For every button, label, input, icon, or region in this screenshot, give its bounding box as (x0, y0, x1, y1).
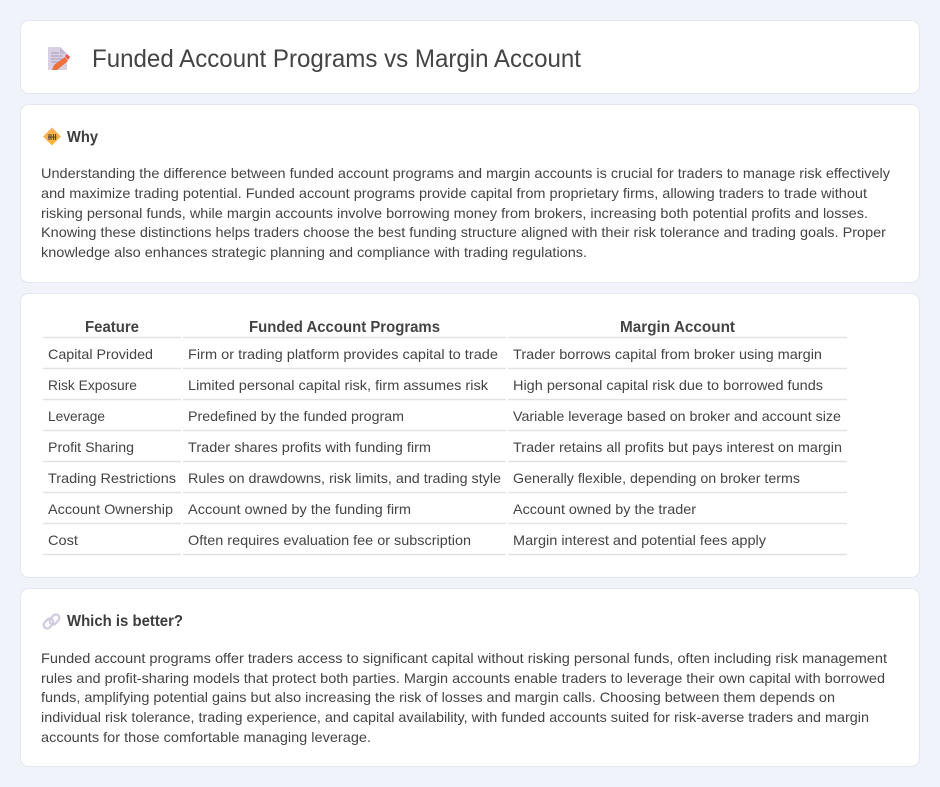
icon: document with pencil (48, 47, 70, 70)
row: profit sharing: Profit Sharing (48, 439, 134, 455)
row: risk exposure: Risk Exposure (48, 377, 137, 393)
row: risk exposure (43, 377, 847, 400)
which is better paragraph: rules and profit-sharing models that protect both parties. Margin accounts enable traders to leverage their own capital with borrowed (41, 670, 885, 686)
row: profit sharing: Trader shares profits with funding firm (188, 439, 431, 455)
title text: Funded Account Programs vs Margin Account (92, 45, 581, 73)
which is better paragraph: accounts for those comfortable managing leverage. (41, 729, 371, 745)
icon: warning diamond (43, 128, 61, 146)
panel: why (20, 104, 920, 282)
row: cost: Margin interest and potential fees apply (513, 532, 766, 548)
row: risk exposure: High personal capital risk due to borrowed funds (513, 377, 823, 393)
panel: which is better (20, 588, 920, 766)
table header: Feature (85, 319, 139, 336)
which is better paragraph: individual risk tolerance, trading experience, and capital availability, with funded accounts suited for risk-averse traders and margin (41, 709, 869, 725)
row: trading restrictions: Generally flexible, depending on broker terms (513, 470, 800, 486)
row: capital provided: Firm or trading platform provides capital to trade (188, 346, 498, 362)
row: cost (43, 532, 847, 554)
row: capital provided (43, 346, 847, 368)
row: capital provided: Trader borrows capital from broker using margin (513, 346, 822, 362)
table header (43, 319, 847, 338)
which is better paragraph: funds, amplifying potential gains but also increasing the risk of losses and margin calls. Choosing between them depends on (41, 689, 835, 705)
row: account ownership (43, 501, 847, 524)
why paragraph: Understanding the difference between funded account programs and margin accounts is crucial for traders to manage risk effectively (41, 165, 890, 181)
why paragraph (41, 165, 890, 260)
row: account ownership: Account Ownership (48, 501, 173, 517)
row: cost: Cost (48, 532, 78, 548)
heading: why: Why (67, 129, 98, 146)
panel: comparison table (20, 294, 920, 578)
row: cost: Often requires evaluation fee or subscription (188, 532, 471, 548)
row: risk exposure: Limited personal capital risk, firm assumes risk (188, 377, 489, 393)
row: account ownership: Account owned by the trader (513, 501, 696, 517)
why paragraph: risking personal funds, while margin accounts involve borrowing money from brokers, increasing both potential profits and losses. (41, 205, 868, 221)
row: trading restrictions: Rules on drawdowns, risk limits, and trading style (188, 470, 501, 486)
icon: chain link (42, 613, 61, 630)
row: leverage: Predefined by the funded program (188, 408, 404, 424)
row: trading restrictions (43, 470, 847, 492)
row: leverage: Variable leverage based on broker and account size (513, 408, 841, 424)
why paragraph: knowledge also enhances strategic planning and compliance with trading regulations. (41, 244, 587, 260)
row: capital provided: Capital Provided (48, 346, 153, 362)
table header: Funded Account Programs (249, 319, 440, 336)
table header: Margin Account (620, 319, 736, 336)
row: account ownership: Account owned by the funding firm (188, 501, 411, 517)
row: profit sharing (43, 439, 847, 462)
why paragraph: and maximize trading potential. Funded account programs provide capital from proprietary firms, allowing traders to trade without (41, 185, 867, 201)
panel: title (20, 20, 920, 94)
row: leverage: Leverage (48, 408, 105, 424)
row: leverage (43, 408, 847, 430)
which is better paragraph (41, 650, 887, 745)
why paragraph: Knowing these distinctions helps traders choose the best funding structure aligned with their risk tolerance and trading goals. Proper (41, 224, 886, 240)
heading: which is better: Which is better? (67, 613, 183, 630)
which is better paragraph: Funded account programs offer traders access to significant capital without risking personal funds, often including risk management (41, 650, 887, 666)
row: trading restrictions: Trading Restrictions (48, 470, 176, 486)
row: profit sharing: Trader retains all profits but pays interest on margin (513, 439, 842, 455)
